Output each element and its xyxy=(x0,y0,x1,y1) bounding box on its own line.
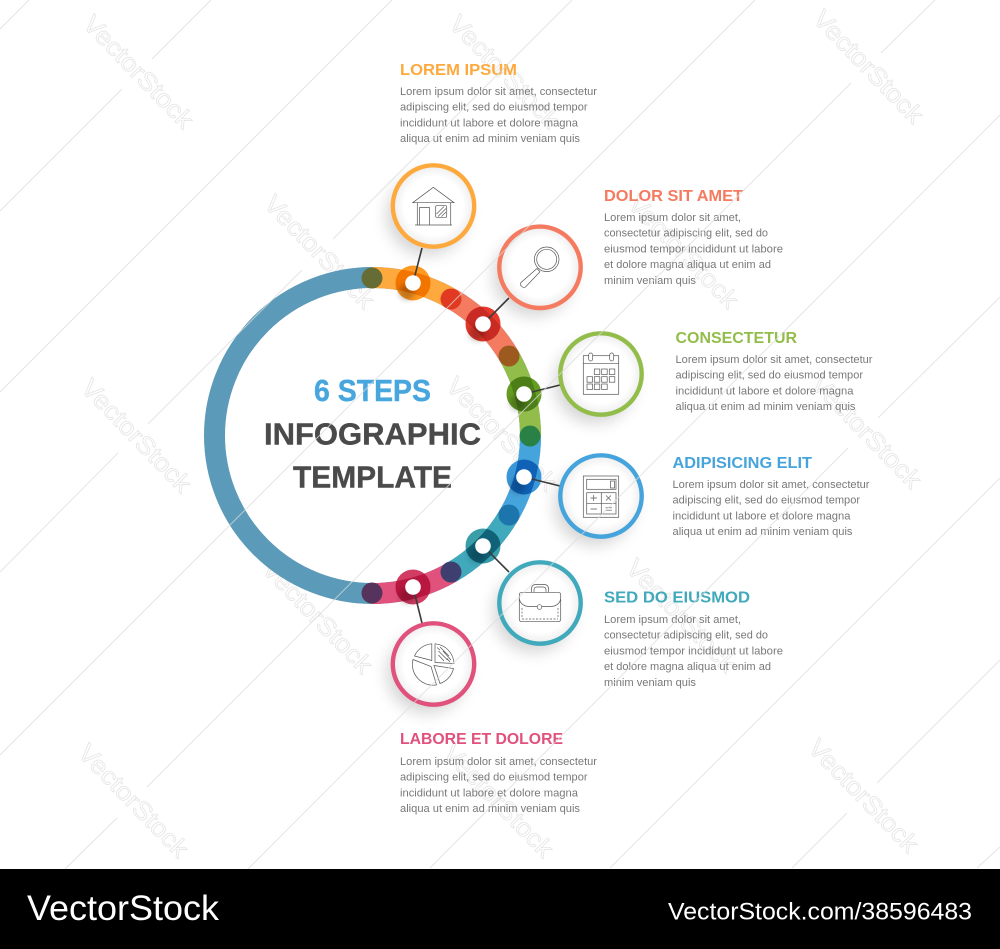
ring segment: pink xyxy=(372,572,452,594)
body: sed do eiusmod: consectetur adipiscing elit, sed do xyxy=(604,630,768,642)
ring segment: orange xyxy=(372,278,452,299)
body: dolor sit amet: minim veniam quis xyxy=(604,275,696,287)
heading: dolor sit amet: DOLOR SIT AMET xyxy=(604,188,743,205)
body: lorem ipsum: adipiscing elit, sed do eiusmod tempor xyxy=(400,102,588,114)
watermark text pattern: VectorStock xyxy=(75,374,197,499)
body: sed do eiusmod: minim veniam quis xyxy=(604,677,696,689)
title: 6 STEPS xyxy=(314,373,431,408)
body: lorem ipsum: Lorem ipsum dolor sit amet, consectetur xyxy=(400,86,597,98)
heading: consectetur: CONSECTETUR xyxy=(676,330,797,347)
text block: adipisicing elit xyxy=(672,455,870,538)
body: consectetur: aliqua ut enim ad minim veniam quis xyxy=(676,401,856,413)
icon: magnifier xyxy=(520,247,559,288)
body: adipisicing elit: Lorem ipsum dolor sit amet, consectetur xyxy=(672,479,870,491)
body: consectetur: incididunt ut labore et dolore magna xyxy=(676,385,854,397)
body: lorem ipsum: aliqua ut enim ad minim veniam quis xyxy=(400,133,581,145)
marker: blue xyxy=(506,460,542,496)
watermark text pattern: VectorStock xyxy=(72,739,194,864)
body: labore et dolore: Lorem ipsum dolor sit amet, consectetur xyxy=(400,756,597,768)
title xyxy=(264,373,481,494)
ring segment: coral xyxy=(452,299,509,356)
body: labore et dolore: incididunt ut labore et dolore magna xyxy=(400,787,579,799)
body: adipisicing elit xyxy=(672,479,870,538)
watermark text pattern: VectorStock xyxy=(77,10,199,135)
text block: lorem ipsum xyxy=(400,62,597,145)
center ring with six colored segments xyxy=(214,278,530,594)
title: INFOGRAPHIC xyxy=(264,416,481,452)
watermark text pattern: VectorStock xyxy=(256,555,378,680)
marker: teal xyxy=(466,528,500,565)
watermark text pattern: VectorStock xyxy=(258,190,380,315)
body: labore et dolore: aliqua ut enim ad minim veniam quis xyxy=(400,803,581,815)
ring segment: green xyxy=(509,356,530,436)
body: dolor sit amet: eiusmod tempor incididunt ut labore xyxy=(604,243,783,255)
footer logo text: VectorStock xyxy=(27,889,220,928)
white marker centers xyxy=(405,275,532,595)
text block: dolor sit amet xyxy=(604,188,783,287)
icon: house xyxy=(413,187,454,225)
body: consectetur xyxy=(676,354,873,413)
text block: consectetur xyxy=(676,330,873,413)
footer image id: VectorStock.com/38596483 xyxy=(668,898,972,926)
ring segment: blue xyxy=(509,436,530,514)
icon circle: calculator xyxy=(554,455,642,545)
icon circle: briefcase xyxy=(494,562,581,652)
watermark text pattern: VectorStock xyxy=(440,372,562,497)
ring segment: teal xyxy=(452,514,509,572)
body: adipisicing elit: adipiscing elit, sed do eiusmod tempor xyxy=(672,495,860,507)
body: dolor sit amet xyxy=(604,212,783,287)
icon circle: pie chart xyxy=(387,623,474,713)
icon: calculator xyxy=(583,476,619,517)
heading: labore et dolore: LABORE ET DOLORE xyxy=(400,731,563,748)
heading: sed do eiusmod: SED DO EIUSMOD xyxy=(604,590,750,606)
marker: orange xyxy=(396,266,430,302)
icon circle: calendar xyxy=(554,333,642,423)
body: dolor sit amet: et dolore magna aliqua ut enim ad xyxy=(604,259,771,271)
marker: pink xyxy=(396,570,430,606)
body: lorem ipsum xyxy=(400,86,597,145)
heading: lorem ipsum: LOREM IPSUM xyxy=(400,62,517,79)
body: labore et dolore: adipiscing elit, sed do eiusmod tempor xyxy=(400,772,588,784)
body: dolor sit amet: Lorem ipsum dolor sit amet, xyxy=(604,212,741,224)
heading: adipisicing elit: ADIPISICING ELIT xyxy=(672,455,812,472)
marker: coral xyxy=(466,306,500,344)
body: sed do eiusmod: et dolore magna aliqua ut enim ad xyxy=(604,661,771,673)
icon: calendar xyxy=(583,353,619,394)
icon: briefcase xyxy=(519,584,561,622)
body: adipisicing elit: incididunt ut labore et dolore magna xyxy=(672,510,851,522)
body: sed do eiusmod: eiusmod tempor incididunt ut labore xyxy=(604,645,783,657)
watermark text pattern: VectorStock xyxy=(805,370,927,495)
body: dolor sit amet: consectetur adipiscing elit, sed do xyxy=(604,228,768,240)
watermark text pattern: VectorStock xyxy=(437,739,559,864)
text block: sed do eiusmod xyxy=(604,590,783,689)
watermark text pattern: VectorStock xyxy=(802,734,924,859)
ring joint dots xyxy=(362,268,540,604)
icon: pie chart xyxy=(412,644,454,685)
text block: labore et dolore xyxy=(400,731,597,815)
icon circle: magnifier xyxy=(494,227,581,316)
title: TEMPLATE xyxy=(293,460,452,494)
body: labore et dolore xyxy=(400,756,597,815)
watermark text pattern: VectorStock xyxy=(807,5,929,130)
watermark text pattern: VectorStock xyxy=(443,10,565,135)
body: sed do eiusmod: Lorem ipsum dolor sit amet, xyxy=(604,614,741,626)
connector lines xyxy=(413,248,560,623)
footer bar xyxy=(0,869,1000,949)
icon circle: house xyxy=(387,165,474,255)
step markers on the ring xyxy=(396,266,542,606)
watermark text pattern: VectorStock xyxy=(622,190,744,315)
body: sed do eiusmod xyxy=(604,614,783,689)
watermark text pattern xyxy=(72,5,929,864)
marker: green xyxy=(506,376,542,414)
body: lorem ipsum: incididunt ut labore et dolore magna xyxy=(400,117,579,129)
body: consectetur: adipiscing elit, sed do eiusmod tempor xyxy=(676,370,863,382)
watermark text pattern: VectorStock xyxy=(620,554,742,679)
body: adipisicing elit: aliqua ut enim ad minim veniam quis xyxy=(672,526,853,538)
body: consectetur: Lorem ipsum dolor sit amet, consectetur xyxy=(676,354,873,366)
